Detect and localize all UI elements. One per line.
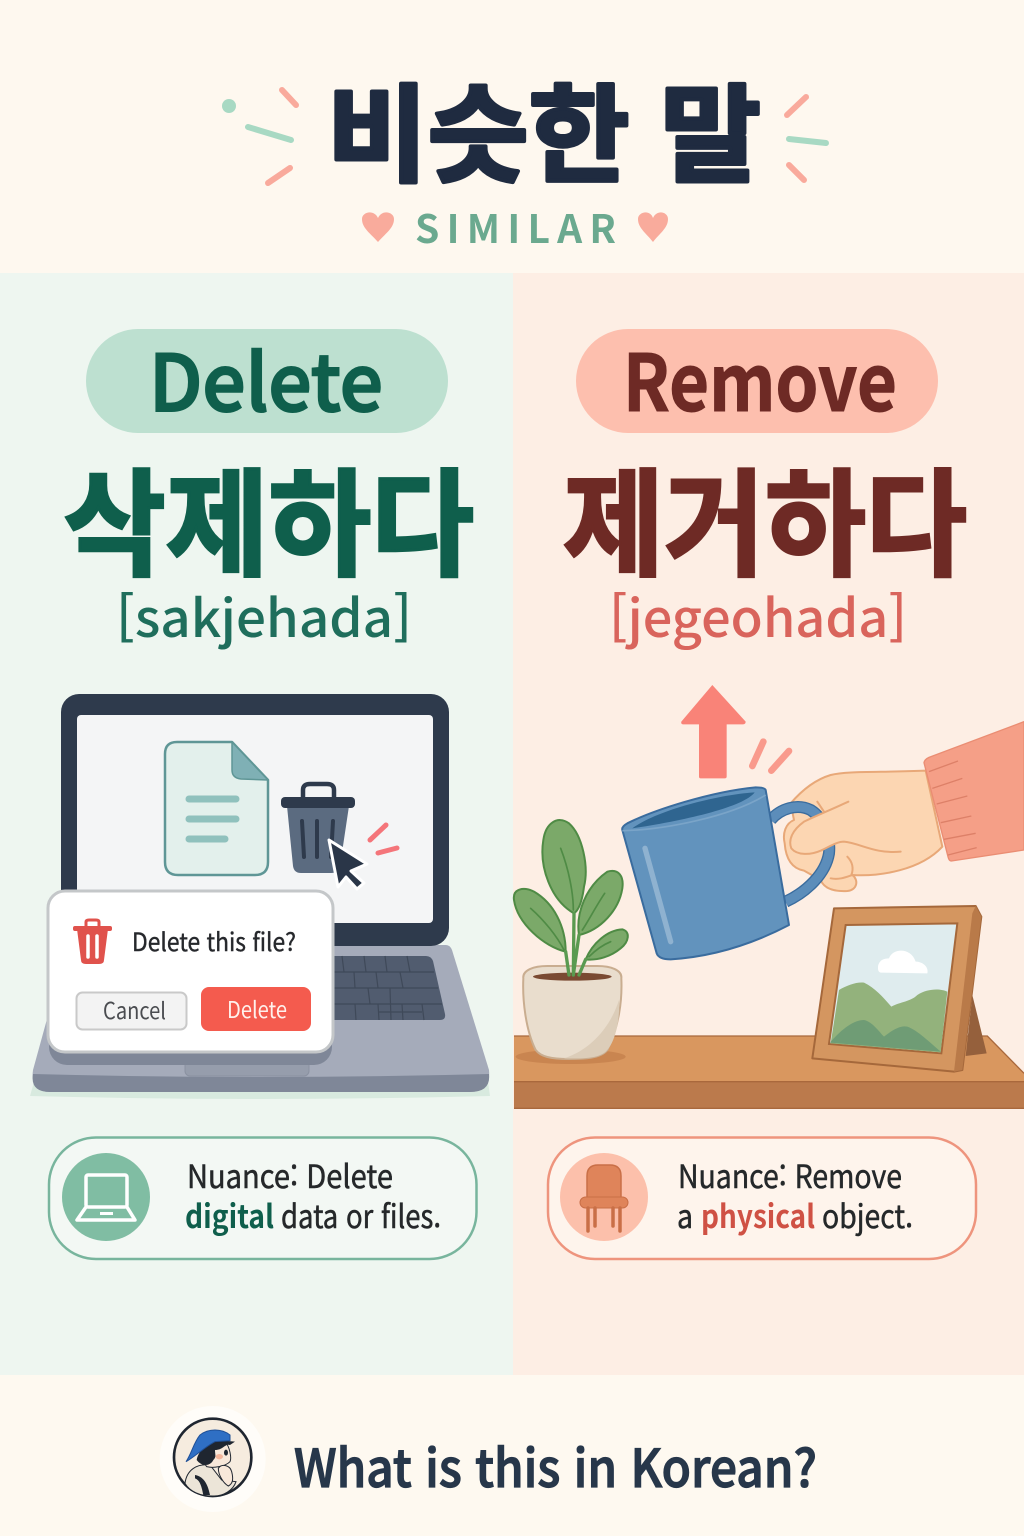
header panel <box>0 0 1024 273</box>
panel: delete <box>0 273 513 1375</box>
nuance text: remove: physical <box>701 1192 815 1238</box>
subtitle: SIMILAR <box>415 199 616 255</box>
delete button <box>201 987 311 1031</box>
flower pot <box>523 913 621 1059</box>
nuance text: remove: Nuance: Remove <box>678 1152 902 1198</box>
nuance text: delete <box>185 1152 441 1238</box>
delete pill heading: Delete <box>149 322 383 434</box>
laptop screen <box>61 694 449 946</box>
delete button: Delete <box>227 991 287 1025</box>
nuance text: remove: object. <box>822 1192 913 1238</box>
icon: laptop badge <box>62 1153 150 1241</box>
cancel button <box>76 992 186 1030</box>
icon: left heart <box>362 212 394 242</box>
right sparkle accents <box>787 97 826 180</box>
korean word: remove: 제거하다 <box>563 432 967 600</box>
icon: cursor <box>329 840 367 889</box>
remove pill heading: Remove <box>623 322 897 434</box>
mug <box>622 787 829 959</box>
romanization: delete: [sakjehada] <box>116 577 412 652</box>
nuance text: delete: Nuance: Delete <box>187 1152 393 1198</box>
icon: trash can <box>281 784 355 873</box>
panel: remove <box>513 273 1024 1375</box>
delete pill heading <box>86 322 448 434</box>
illustration: laptop with delete dialog <box>30 694 490 1099</box>
click ticks <box>370 825 397 853</box>
picture frame <box>812 906 987 1072</box>
nuance text: remove: a <box>677 1192 693 1238</box>
nuance text: delete: digital <box>185 1192 274 1238</box>
romanization: remove: [jegeohada] <box>609 577 907 652</box>
icon: right heart <box>638 212 668 242</box>
nuance box: remove <box>548 1138 976 1259</box>
hand thumb over handle <box>790 802 901 854</box>
footer question: What is this in Korean? <box>294 1427 817 1502</box>
hand palm and back fingers <box>784 771 942 891</box>
nuance text: delete: data or files. <box>281 1192 441 1238</box>
avatar <box>160 1406 266 1512</box>
title: 비슷한 말 <box>327 50 761 204</box>
korean word: delete: 삭제하다 <box>63 432 474 600</box>
icon: document <box>165 742 268 875</box>
illustration: lifting a mug from a shelf <box>514 685 1024 1108</box>
icon: red trash <box>73 920 112 964</box>
dialog text: Delete this file? <box>132 923 296 959</box>
nuance box: delete <box>49 1138 476 1259</box>
plant <box>514 820 628 960</box>
left sparkle accents <box>222 90 296 183</box>
sweater cuff <box>924 722 1024 861</box>
motion ticks <box>752 742 789 771</box>
laptop base <box>30 945 490 1099</box>
nuance text: remove <box>677 1152 913 1238</box>
up arrow <box>681 685 746 778</box>
keyboard <box>320 956 445 1020</box>
shelf <box>514 1036 1024 1108</box>
footer panel <box>0 1375 1024 1536</box>
icon: chair badge <box>560 1153 648 1241</box>
dialog box <box>48 891 333 1065</box>
cancel button: Cancel <box>103 992 166 1026</box>
